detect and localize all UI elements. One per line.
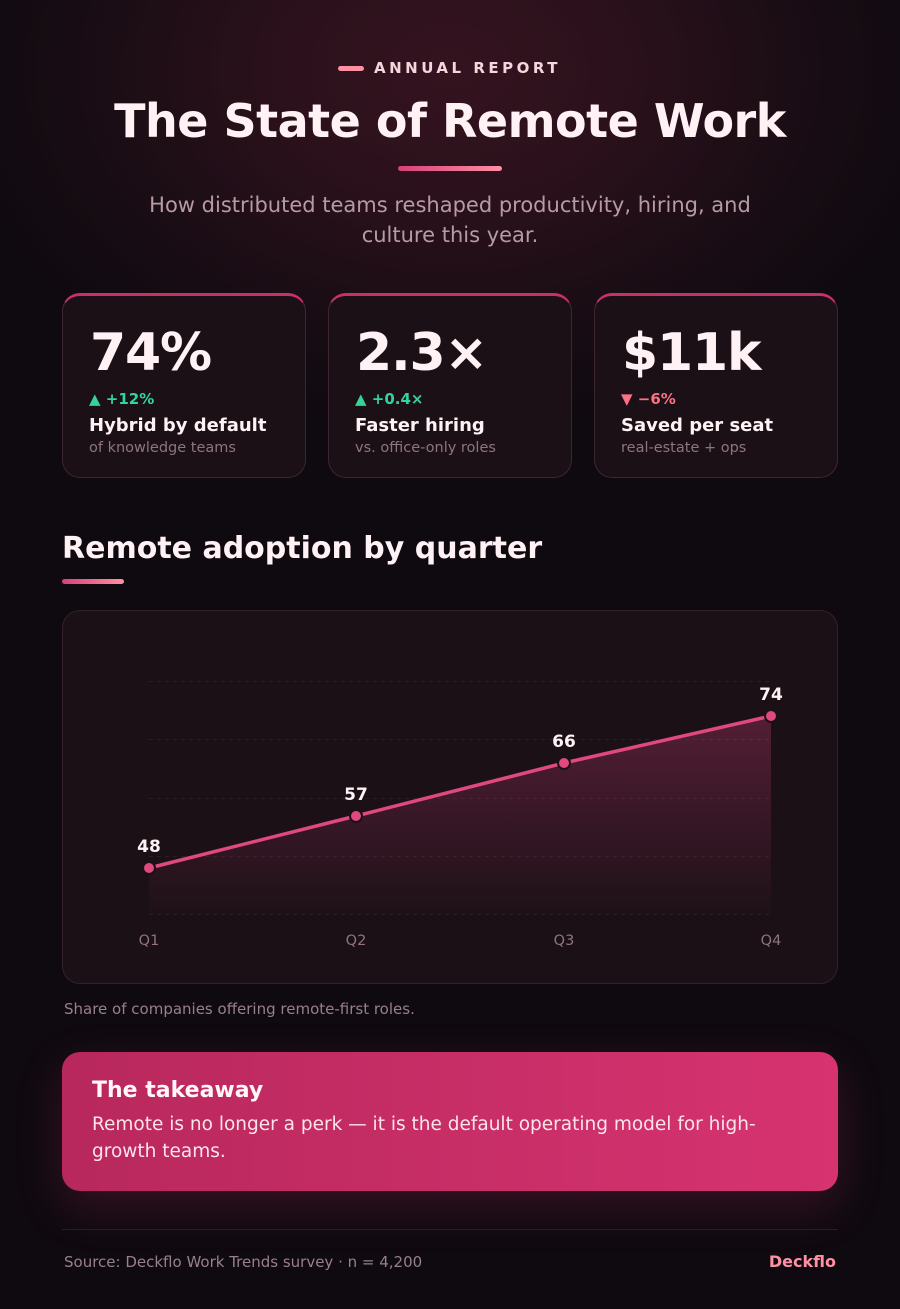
value labels: 66 [552,732,576,752]
stat card: saved per seat: Saved per seat [621,415,773,436]
stat card: faster hiring: Faster hiring [355,415,485,436]
stat card: saved per seat [594,293,838,478]
quarter labels [139,933,781,949]
stat card: saved per seat: real-estate + ops [621,440,746,456]
stat card: faster hiring: 2.3× [356,323,487,383]
stat card: hybrid by default: of knowledge teams [89,440,236,456]
value labels: 48 [137,837,161,857]
stat card: faster hiring [328,293,572,478]
chart panel [62,610,838,984]
value labels: 74 [759,685,783,705]
stat card: hybrid by default [62,293,306,478]
takeaway heading: The takeaway [92,1078,263,1103]
brand: Deckflo [769,1252,836,1271]
eyebrow: annual report: ANNUAL REPORT [374,59,561,77]
subtitle: culture this year. [362,223,538,247]
stat card: faster hiring: ▲ +0.4× [355,390,423,408]
takeaway callout [62,1052,838,1191]
quarter labels: Q1 [139,933,159,949]
value labels: 57 [344,785,368,805]
stat card: saved per seat: $11k [622,323,760,383]
title underline [398,166,502,171]
value labels [137,685,783,857]
subtitle: How distributed teams reshaped productivity, hiring, and [149,193,751,217]
title: The State of Remote Work [114,94,786,148]
stat card: hybrid by default: Hybrid by default [89,415,266,436]
data points [143,710,777,874]
takeaway text [92,1114,756,1162]
chart caption: Share of companies offering remote-first roles. [64,1000,415,1018]
quarter labels: Q2 [346,933,366,949]
area fill [149,716,771,914]
quarter labels: Q3 [554,933,574,949]
stat card: saved per seat: ▼ −6% [621,390,676,408]
stat card: hybrid by default: 74% [90,323,211,383]
takeaway text: growth teams. [92,1141,226,1162]
quarter labels: Q4 [761,933,781,949]
stat card: hybrid by default: ▲ +12% [89,390,154,408]
section heading: Remote adoption by quarter [62,531,542,566]
section heading underline [62,579,124,584]
takeaway text: Remote is no longer a perk — it is the default operating model for high- [92,1114,756,1135]
subtitle [149,193,751,247]
trend line [149,716,771,868]
line chart [137,681,783,949]
stat card: faster hiring: vs. office-only roles [355,440,496,456]
source note: Source: Deckflo Work Trends survey · n = 4,200 [64,1253,422,1271]
